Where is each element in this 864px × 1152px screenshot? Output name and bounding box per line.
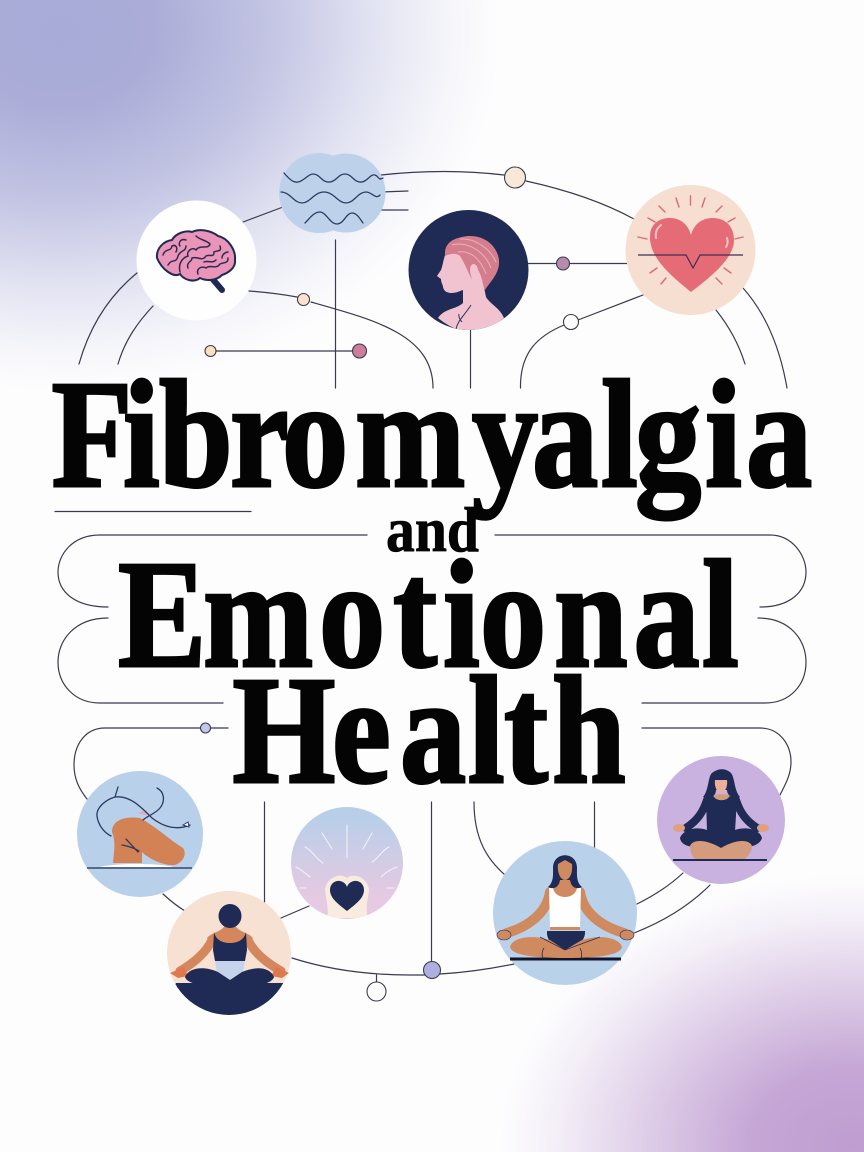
icon: profile of a woman bbox=[408, 210, 528, 331]
icon: brain bbox=[136, 200, 256, 320]
title: Fibromyalgia: Fibromyalgia bbox=[52, 350, 812, 520]
icon: heart with pulse bbox=[626, 185, 756, 315]
icon: seated figure from behind bbox=[167, 891, 291, 1015]
nodes bbox=[200, 167, 578, 1001]
icon: stretching body bbox=[77, 771, 203, 897]
connector lines: middle brackets bbox=[55, 512, 806, 799]
title: Emotional: Emotional bbox=[118, 530, 739, 700]
icon: heart with radiating light bbox=[291, 807, 403, 919]
connector lines: top network bbox=[79, 172, 787, 388]
title: Health: Health bbox=[232, 646, 626, 816]
connector lines: bottom network bbox=[163, 802, 710, 982]
icon: blue waves bbox=[279, 153, 386, 233]
title: and: and bbox=[386, 494, 479, 565]
icon: seated meditation, blue bbox=[493, 841, 637, 985]
icon: seated meditation, purple bbox=[657, 756, 785, 884]
